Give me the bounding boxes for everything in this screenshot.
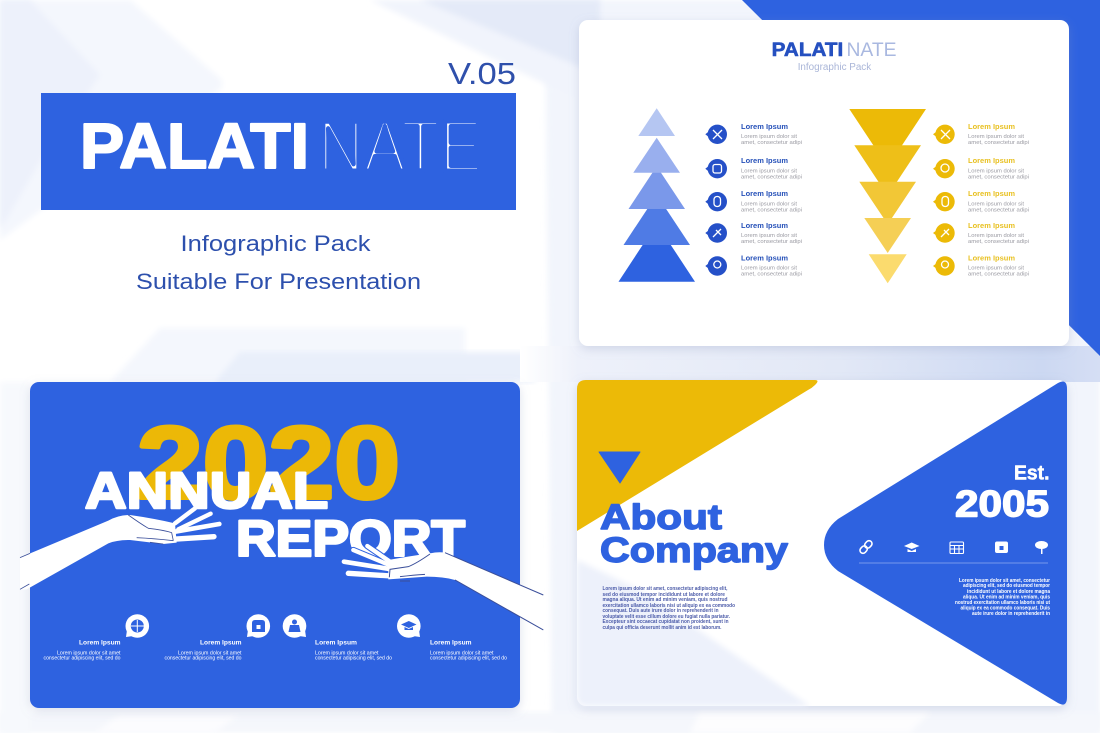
blue panel paragraph: aute irure dolor in reprehenderit in [972, 611, 1050, 617]
heading: about company [600, 498, 789, 570]
feature labels: Lorem Ipsum [315, 640, 357, 646]
blue icon bubbles [705, 125, 727, 276]
blue list text: Lorem ipsum dolor sit [741, 168, 797, 174]
pale corner shape [577, 560, 810, 706]
subtitle [136, 231, 421, 294]
feature labels [44, 640, 507, 662]
blue list text: Lorem Ipsum [741, 158, 788, 165]
company paragraph: consequat. Duis aute irure dolor in reprehenderit in [602, 608, 718, 614]
company paragraph: Excepteur sint occaecat cupidatat non proident, sunt in [602, 619, 728, 625]
icon: graduation cap [904, 542, 920, 552]
blue triangle marker [599, 452, 640, 483]
yellow list text: Lorem Ipsum [968, 223, 1015, 230]
blue list text: Lorem Ipsum [741, 256, 788, 262]
feature labels: consectetur adipiscing elit, sed do [164, 656, 242, 662]
blue list text: Lorem ipsum dolor sit [741, 134, 797, 140]
illustration: left hand [20, 508, 219, 589]
panel: pyramid infographic slide [579, 20, 1069, 346]
illustration: right hand [344, 546, 543, 630]
blue list text: amet, consectetur adipi [741, 174, 802, 180]
panel: about company slide [577, 380, 1067, 706]
blue triangle panel [824, 381, 1067, 705]
blue panel paragraph: nostrud exercitation ullamco laboris nisi ut [955, 600, 1050, 606]
company paragraph [602, 586, 736, 631]
slide heading: Infographic Pack [798, 62, 872, 73]
heading: about company: Company [600, 531, 789, 570]
divider [859, 562, 1048, 564]
yellow list text: Lorem Ipsum [968, 256, 1015, 262]
yellow list text: amet, consectetur adipi [968, 208, 1029, 214]
company paragraph: sed do eiusmod tempor incididunt ut labore et dolore [602, 592, 725, 598]
icon: graduation cap bubble [397, 614, 421, 638]
company paragraph: exercitation ullamco laboris nisi ut aliquip ex ea commodo [602, 603, 736, 609]
icon: case bubble [246, 614, 270, 638]
blue stacked triangles [618, 108, 695, 282]
subtitle: Suitable For Presentation [136, 269, 421, 294]
yellow icon bubbles [933, 125, 955, 276]
yellow list text: Lorem Ipsum [968, 124, 1015, 131]
feature labels: Lorem Ipsum [430, 640, 472, 646]
blue panel paragraph [955, 578, 1051, 617]
yellow list text: amet, consectetur adipi [968, 174, 1029, 180]
blue list text: Lorem ipsum dolor sit [741, 266, 797, 272]
company paragraph: magna aliqua. Ut enim ad minim veniam, quis nostrud [602, 597, 728, 603]
feature labels: Lorem ipsum dolor sit amet [430, 650, 494, 656]
yellow list text [968, 124, 1029, 278]
feature labels: Lorem Ipsum [200, 640, 242, 646]
yellow list text: Lorem ipsum dolor sit [968, 202, 1024, 208]
feature labels: Lorem Ipsum [79, 640, 121, 646]
feature labels: Lorem ipsum dolor sit amet [57, 650, 121, 656]
icon: bag bubble [283, 614, 306, 638]
blue panel paragraph: adipiscing elit, sed do eiusmod tempor [963, 583, 1051, 589]
yellow stacked inverted triangles [849, 109, 926, 283]
corner shape: blue diagonal behind top slide [742, 0, 1100, 356]
est label: Est. [1014, 463, 1050, 485]
yellow list text: amet, consectetur adipi [968, 272, 1029, 278]
icon: link [859, 539, 873, 555]
panel: annual report slide [20, 382, 543, 708]
title: PALATI bold: PALATI [80, 110, 309, 182]
blue list text: amet, consectetur adipi [741, 239, 802, 245]
blue list text [741, 124, 802, 278]
icon: bag [995, 542, 1008, 553]
yellow list text: Lorem ipsum dolor sit [968, 168, 1024, 174]
title banner [41, 93, 516, 210]
slide heading [772, 40, 896, 73]
heading: about company: About [600, 498, 722, 537]
company paragraph: voluptate velit esse cillum dolore eu fugiat nulla pariatur. [602, 614, 730, 620]
feature labels: consectetur adipiscing elit, sed do [315, 656, 392, 662]
blue list text: amet, consectetur adipi [741, 272, 802, 278]
feature labels: consectetur adipiscing elit, sed do [44, 656, 121, 662]
feature labels: Lorem ipsum dolor sit amet [178, 650, 242, 656]
yellow list text: Lorem Ipsum [968, 158, 1015, 165]
blue list text: Lorem Ipsum [741, 124, 788, 131]
blue list text: Lorem ipsum dolor sit [741, 233, 797, 239]
blue list text: amet, consectetur adipi [741, 140, 802, 146]
icon: globe bubble [126, 614, 149, 638]
title: NATE thin: NATE [318, 107, 482, 187]
yellow list text: Lorem ipsum dolor sit [968, 233, 1024, 239]
year 2020: 2020 [137, 406, 400, 520]
feature labels: Lorem ipsum dolor sit amet [315, 650, 379, 656]
slide heading: PALATI [772, 40, 843, 61]
blue panel paragraph: Lorem ipsum dolor sit amet, consectetur [959, 578, 1051, 584]
blue panel paragraph: aliqua. Ut enim ad minim veniam, quis [963, 594, 1050, 600]
icon: cloud [1035, 541, 1048, 554]
blue list text: Lorem Ipsum [741, 191, 788, 198]
yellow list text: Lorem ipsum dolor sit [968, 134, 1024, 140]
yellow list text: amet, consectetur adipi [968, 140, 1029, 146]
slide heading: NATE [846, 40, 896, 61]
company paragraph: Lorem ipsum dolor sit amet, consectetur adipiscing elit, [602, 586, 728, 592]
yellow list text: Lorem ipsum dolor sit [968, 266, 1024, 272]
blue panel paragraph: incididunt ut labore et dolore magna [967, 589, 1051, 595]
blue list text: amet, consectetur adipi [741, 208, 802, 214]
company paragraph: culpa qui officia deserunt mollit anim id est laborum. [602, 625, 722, 631]
blue list text: Lorem ipsum dolor sit [741, 202, 797, 208]
feature labels: consectetur adipiscing elit, sed do [430, 656, 507, 662]
yellow corner shape [577, 380, 818, 531]
yellow list text: Lorem Ipsum [968, 191, 1015, 198]
icon: calendar [950, 542, 964, 554]
blue list text: Lorem Ipsum [741, 223, 788, 230]
heading: report: REPORT [236, 510, 465, 567]
blue panel paragraph: aliquip ex ea commodo consequat. Duis [960, 606, 1050, 612]
subtitle: Infographic Pack [180, 231, 372, 256]
heading: annual: ANNUAL [85, 462, 328, 519]
yellow list text: amet, consectetur adipi [968, 239, 1029, 245]
version label: V.05 [448, 56, 516, 91]
year 2005: 2005 [955, 484, 1049, 524]
